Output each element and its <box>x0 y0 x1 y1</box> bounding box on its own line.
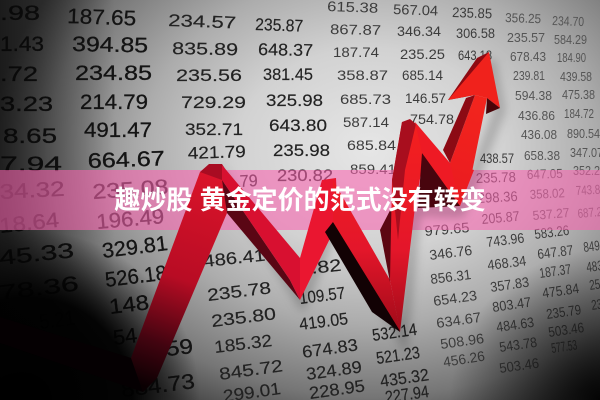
number columns: right: 436.86 <box>518 108 555 123</box>
number columns: left: 34.32 <box>0 178 65 204</box>
number columns: centre right: 643.18 <box>458 47 492 63</box>
number columns: centre right: 306.58 <box>456 25 495 41</box>
number columns: centre right: 205.87 <box>481 208 520 227</box>
second falling band dark face <box>325 222 400 332</box>
number columns: lower right: 743.96 <box>485 229 525 250</box>
number columns: centre left: 643.80 <box>269 116 327 135</box>
number columns: centre left: 729.29 <box>181 93 246 112</box>
number columns: right: 356.25 <box>505 10 541 26</box>
number columns: lower right: 468.34 <box>486 252 527 273</box>
first falling band <box>222 165 300 300</box>
number columns: centre right: 508.96 <box>439 330 485 352</box>
number columns: right: 537.27 <box>532 205 570 223</box>
third falling band dark face <box>418 153 460 208</box>
number columns: right: 594.38 <box>515 88 552 103</box>
number columns: centre right: 146.57 <box>405 90 446 106</box>
pink title band <box>0 170 600 230</box>
number columns: centre left: 674.83 <box>301 335 359 362</box>
number columns: left: 214.79 <box>80 91 148 114</box>
number columns: centre right: 856.31 <box>429 266 472 287</box>
number columns: left: .72 <box>0 63 38 86</box>
arrowhead dark face <box>448 52 489 100</box>
number columns: centre left: 325.98 <box>266 91 323 110</box>
number columns: right: 439.58 <box>560 69 592 84</box>
number columns: left: 491.47 <box>84 119 152 142</box>
number columns: left <box>0 2 196 400</box>
arrowhead <box>448 52 500 108</box>
red zigzag arrow <box>0 52 500 392</box>
number columns: right: 239.81 <box>513 68 545 83</box>
number columns: centre left: 235.87 <box>255 15 303 36</box>
number columns: centre left: 435.32 <box>379 365 430 391</box>
number columns: centre left: 486.41 <box>202 246 266 271</box>
number columns: centre right: 567.04 <box>393 1 439 19</box>
arrowhead lower shade <box>486 98 500 114</box>
number columns: centre right: 685.73 <box>340 91 391 107</box>
notch shadow <box>380 195 398 282</box>
number columns: centre left: 648.37 <box>258 40 313 60</box>
number columns: left: 196.49 <box>95 205 165 234</box>
number columns: centre left: 521.23 <box>375 343 421 368</box>
number columns: left: 329.81 <box>101 232 169 263</box>
number columns: centre left <box>168 11 430 400</box>
number columns: left: .98 <box>0 2 40 25</box>
second rising band <box>300 178 338 300</box>
number columns: left: 3.23 <box>0 93 53 116</box>
number columns: lower right: 475.84 <box>541 280 580 301</box>
number columns: centre right: 754.78 <box>410 111 454 127</box>
number columns: right: 678.43 <box>510 49 546 64</box>
number columns: centre left: 234.57 <box>168 11 236 32</box>
number columns: lower right: 577.53 <box>550 336 578 356</box>
number columns: lower right <box>485 222 600 376</box>
number columns: centre right: 298.36 <box>477 188 518 206</box>
number columns: right: 584.29 <box>554 32 587 47</box>
number columns: left: 664.67 <box>87 147 165 173</box>
number columns: left: 7.94 <box>0 153 62 176</box>
number columns: centre left: 235.98 <box>273 141 330 160</box>
number columns: centre right: 235.85 <box>452 4 493 21</box>
number columns: lower right: 543.78 <box>498 334 538 355</box>
number columns: centre left: 109.57 <box>298 284 346 308</box>
number columns: right: 184.90 <box>557 50 586 65</box>
number columns: centre left: 845.72 <box>218 356 284 384</box>
number columns: centre right: 859.41 <box>350 161 396 177</box>
number columns: centre right <box>327 0 520 370</box>
shaft dark side <box>443 95 475 163</box>
third falling band <box>415 122 474 206</box>
number columns: centre right: 187.74 <box>333 44 379 60</box>
first peak cap <box>200 164 231 180</box>
number columns: centre left: 235.56 <box>176 66 242 85</box>
number columns: centre left: 532.14 <box>371 320 418 345</box>
number columns: left: 394.85 <box>72 33 148 57</box>
number columns: left: 1.43 <box>0 33 44 56</box>
number columns: centre right: 654.23 <box>432 287 478 309</box>
number columns: centre left: 419.05 <box>298 309 349 334</box>
number columns: centre right: 456.26 <box>442 348 486 370</box>
number columns: left: 148 <box>108 291 150 319</box>
number columns: left: 54 <box>112 324 139 350</box>
number columns: centre left: 381.45 <box>263 65 313 84</box>
third rising band <box>390 122 424 332</box>
number columns: centre left: 0.82 <box>298 256 342 279</box>
peak side face <box>392 119 416 240</box>
number columns: lower right: 187.37 <box>538 261 572 281</box>
number columns: right: 436.08 <box>521 127 557 142</box>
first rising band <box>131 165 227 392</box>
number columns: centre left: 185.32 <box>213 331 273 357</box>
number columns: centre left: 79 <box>239 171 258 191</box>
number columns: lower right: 503.46 <box>547 319 585 340</box>
number columns: left: 234.85 <box>75 62 152 85</box>
number columns: centre right: 346.76 <box>428 242 473 263</box>
number columns: left: 8.65 <box>3 125 57 148</box>
number columns: centre left: 324.89 <box>305 357 363 384</box>
number columns: left: 235.08 <box>92 176 169 204</box>
number columns: lower right: 503.46 <box>498 355 540 376</box>
number columns: centre right: 358.87 <box>337 67 388 83</box>
number columns: lower right: 647.87 <box>536 242 574 262</box>
number columns: left: 526.18 <box>104 262 168 292</box>
title: 趣炒股 黄金定价的范式没有转变 <box>114 185 486 215</box>
number columns: centre right: 235.25 <box>400 46 445 62</box>
number columns: right: 234.70 <box>552 13 584 29</box>
arrow soft shadow <box>218 60 500 338</box>
number columns: lower right: 583.26 <box>533 222 570 242</box>
number columns: centre right: 346.34 <box>397 23 441 39</box>
number columns: right: 235.57 <box>507 30 545 45</box>
first falling band dark face <box>222 180 300 300</box>
number columns: right: 358.02 <box>529 185 565 202</box>
number columns: centre left: 352.71 <box>185 120 243 139</box>
number columns: centre left: 235.78 <box>206 278 272 305</box>
tail segment <box>0 317 157 392</box>
number columns: centre right: 979.65 <box>424 219 470 239</box>
vignette: left edge shadow <box>0 0 115 400</box>
number columns: centre right: 867.87 <box>330 21 381 38</box>
number columns: centre right: 438.57 <box>480 150 514 166</box>
number columns: right: 658.38 <box>524 148 560 163</box>
number columns: centre right: 587.14 <box>343 114 389 130</box>
number columns: centre left: 421.79 <box>187 142 246 163</box>
arrow shaft <box>450 95 487 206</box>
number columns: left: 187.65 <box>67 5 137 30</box>
number columns: right <box>505 10 600 223</box>
number columns: left: .59 <box>158 335 194 362</box>
number columns: centre left: 230.82 <box>277 166 333 185</box>
number columns: centre left: 235.80 <box>210 304 277 331</box>
number columns: centre left: 835.89 <box>172 39 238 59</box>
number columns: centre right: 685.84 <box>347 137 396 153</box>
number columns: centre right: 235.78 <box>476 169 516 186</box>
number columns: right: 647.05 <box>527 166 563 182</box>
second falling band <box>333 180 400 331</box>
number columns: centre right: 634.67 <box>435 309 482 331</box>
number columns: lower right: 235.79 <box>545 301 582 322</box>
number columns: centre right: 685.14 <box>402 67 443 83</box>
number columns: lower right: 484.63 <box>495 314 535 335</box>
number columns: left: 5.21 <box>38 307 76 334</box>
number columns: lower right: 803.47 <box>491 294 532 315</box>
number columns: lower right: 357.83 <box>489 274 530 295</box>
